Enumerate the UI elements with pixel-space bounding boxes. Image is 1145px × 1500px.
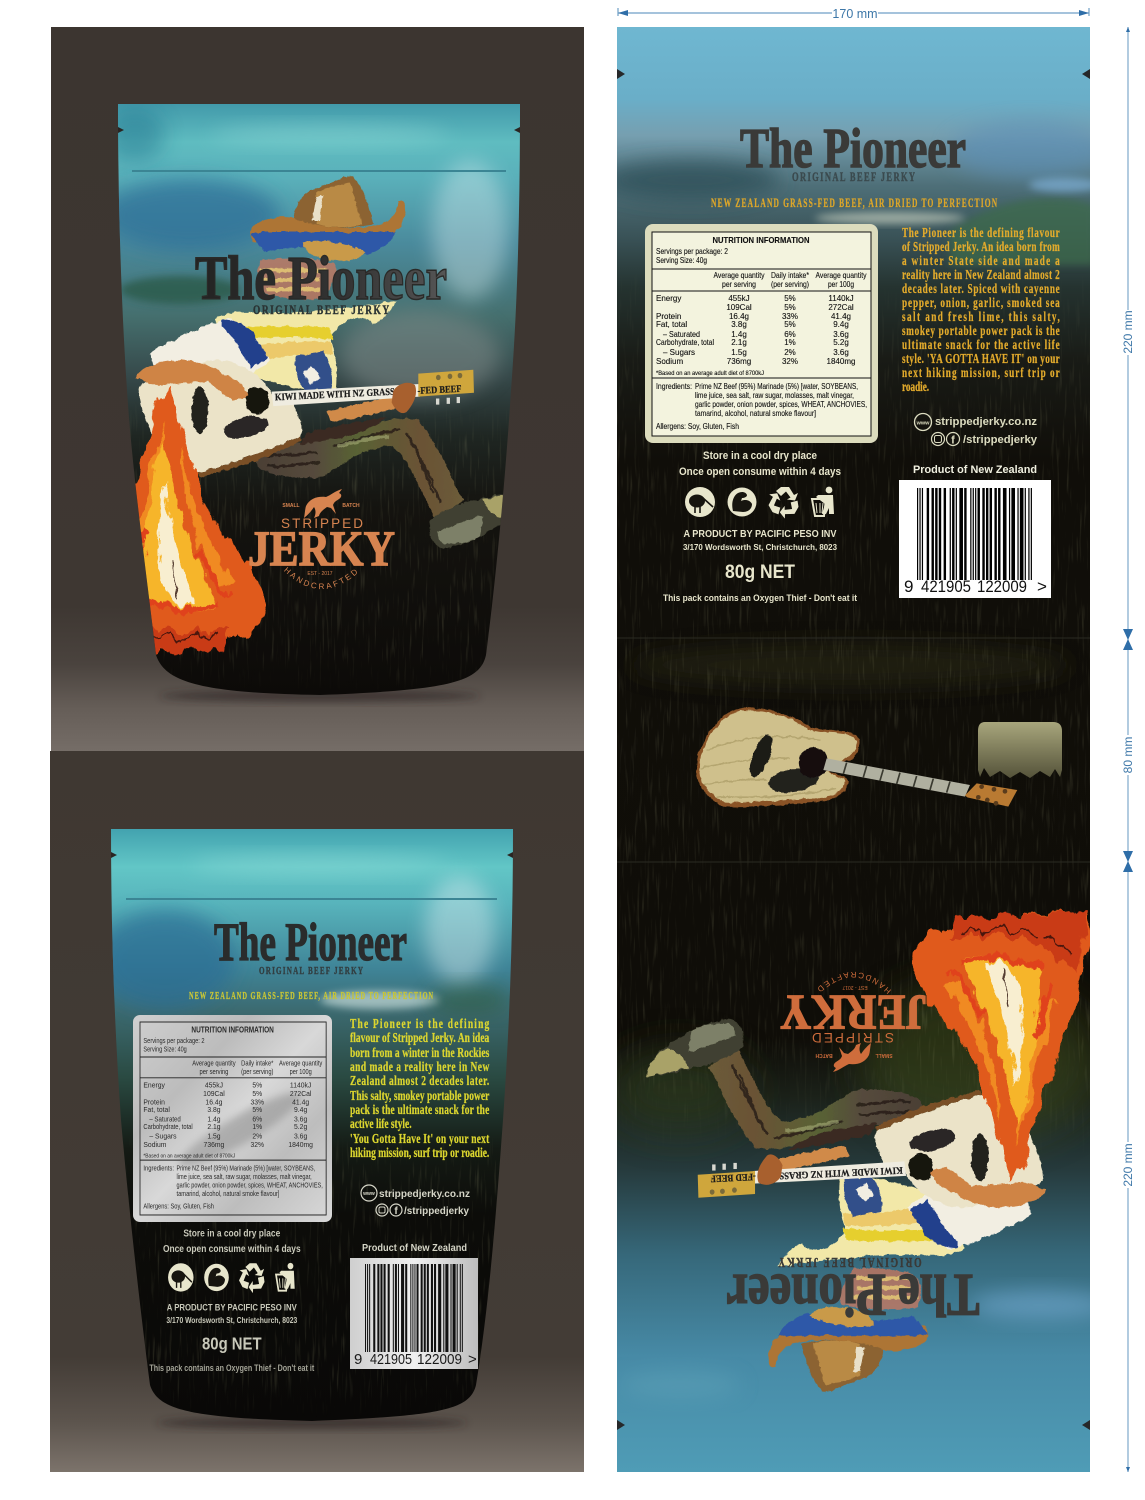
nutrition panel: 5% <box>784 294 796 303</box>
nutrition panel: 5% <box>784 320 796 329</box>
mockup backdrop <box>50 751 584 1472</box>
description copy: salt and fresh lime, this salty, <box>902 310 1060 325</box>
nutrition panel: per 100g <box>290 1067 312 1076</box>
nutrition panel: Daily intake* <box>241 1058 274 1068</box>
dimension: heights 220, 80, 220 mm: 220 mm <box>1121 310 1135 354</box>
description copy: of Stripped Jerky. An idea born from <box>902 240 1060 255</box>
description copy <box>902 226 1060 395</box>
artwork ground <box>600 27 1110 1472</box>
nutrition panel: Fat, total <box>656 320 687 329</box>
guitar neck slogan <box>275 383 462 413</box>
nutrition panel: 32% <box>782 357 798 366</box>
title: The Pioneer: The Pioneer <box>740 118 966 180</box>
nutrition panel: Sodium <box>143 1140 166 1149</box>
nutrition panel: 1140kJ <box>828 294 854 303</box>
nutrition panel: Average quantity <box>816 271 866 280</box>
website and social links: /strippedjerky <box>963 434 1038 446</box>
illustration: acoustic guitar on gusset <box>696 707 1017 807</box>
nutrition panel: tamarind, alcohol, natural smoke flavour] <box>177 1189 279 1198</box>
panel: back pack mockup <box>50 751 584 1472</box>
subtitle: ORIGINAL BEEF JERKY <box>792 170 915 185</box>
nutrition panel: 2% <box>252 1131 263 1140</box>
dimension: heights 220, 80, 220 mm <box>1121 27 1135 1472</box>
barcode: 421905 <box>921 577 971 596</box>
nutrition panel: 5% <box>252 1080 263 1089</box>
panel: front pack mockup <box>51 27 584 751</box>
nutrition panel: 3.6g <box>294 1131 307 1140</box>
nutrition panel: Protein <box>143 1097 165 1106</box>
nutrition panel: Ingredients: <box>656 382 692 391</box>
nutrition panel: Prime NZ Beef (95%) Marinade (5%) [water, SOYBEANS, <box>695 382 858 391</box>
nutrition panel: Serving Size: 40g <box>143 1044 187 1053</box>
brand logo: Stripped Jerky: JERKY <box>248 520 395 576</box>
website and social links: f <box>951 434 955 446</box>
guitar neck slogan: -FED BEEF <box>417 384 462 397</box>
description copy: roadie. <box>902 380 929 395</box>
nutrition panel: 109Cal <box>203 1088 225 1098</box>
barcode: 9 <box>904 577 913 596</box>
description copy: decades later. Spiced with cayenne <box>902 282 1060 297</box>
description copy: This salty, smokey portable power <box>350 1088 489 1103</box>
nutrition panel: 5% <box>252 1105 263 1114</box>
guitar neck slogan, inverted <box>710 1154 903 1185</box>
nutrition panel: 736mg <box>204 1140 224 1149</box>
website and social links: www <box>916 420 930 426</box>
nutrition panel: 3.6g <box>833 348 849 357</box>
panel: flat dieline artwork <box>600 27 1110 1472</box>
guitar neck slogan, inverted: -FED BEEF <box>710 1170 756 1183</box>
website and social links <box>361 1185 470 1217</box>
description copy: pepper, onion, garlic, smoked sea <box>902 296 1060 311</box>
front pouch <box>118 104 520 695</box>
storage, icons, producer and net weight <box>149 1228 314 1373</box>
barcode: > <box>1037 577 1047 596</box>
subtitle: ORIGINAL BEEF JERKY <box>259 966 363 978</box>
nutrition panel: tamarind, alcohol, natural smoke flavour] <box>695 409 816 418</box>
mockup backdrop <box>51 27 584 751</box>
nutrition panel: Prime NZ Beef (95%) Marinade (5%) [water, SOYBEANS, <box>177 1163 315 1173</box>
nutrition panel: Serving Size: 40g <box>656 256 707 265</box>
inverted brand logo: Stripped Jerky: STRIPPED <box>812 1030 894 1045</box>
nutrition panel: garlic powder, onion powder, spices, WHEAT, ANCHOVIES, <box>177 1180 323 1190</box>
nutrition panel: 2.1g <box>731 338 747 347</box>
nutrition panel: Ingredients: <box>143 1163 174 1173</box>
inverted brand logo: Stripped Jerky <box>780 972 927 1072</box>
description copy: ultimate snack for the active life <box>902 338 1060 353</box>
nutrition panel: Average quantity <box>714 271 764 280</box>
website and social links: /strippedjerky <box>404 1205 469 1217</box>
nutrition panel: NUTRITION INFORMATION <box>191 1025 274 1035</box>
nutrition panel: Servings per package: 2 <box>143 1035 205 1045</box>
nutrition panel: 6% <box>252 1114 263 1123</box>
nutrition panel: 16.4g <box>205 1097 222 1106</box>
small batch line with bull icon <box>282 489 360 518</box>
nutrition panel: *Based on an average adult diet of 8700kJ <box>656 371 764 377</box>
description copy: born from a winter in the Rockies <box>350 1045 490 1060</box>
producer details and net weight <box>663 529 858 604</box>
nutrition panel: Allergens: Soy, Gluten, Fish <box>143 1201 214 1210</box>
nutrition panel: 41.4g <box>292 1097 309 1106</box>
description copy: The Pioneer is the defining flavour <box>902 226 1060 241</box>
barcode <box>899 480 1051 598</box>
storage instructions: Store in a cool dry place <box>703 450 817 462</box>
nutrition panel: lime juice, sea salt, raw sugar, molasses, malt vinegar, <box>177 1172 312 1181</box>
description copy: style. 'YA GOTTA HAVE IT' on your <box>902 352 1060 367</box>
nutrition panel <box>645 224 878 443</box>
storage, icons, producer and net weight: 3/170 Wordsworth St, Christchurch, 8023 <box>166 1315 297 1325</box>
nutrition panel: 455kJ <box>205 1080 223 1089</box>
nutrition panel: 3.8g <box>731 320 747 329</box>
inverted brand logo: Stripped Jerky: SMALL <box>875 1052 893 1058</box>
nutrition panel: Fat, total <box>143 1105 170 1114</box>
small batch line with bull icon: BATCH <box>342 503 360 509</box>
nutrition panel: 455kJ <box>728 294 750 303</box>
inverted brand logo: Stripped Jerky: BATCH <box>815 1052 833 1058</box>
storage instructions: Once open consume within 4 days <box>679 466 841 478</box>
icons: kiwi, muscle, recycle, litter <box>685 487 834 522</box>
nutrition panel: per 100g <box>828 280 854 289</box>
nutrition panel: per serving <box>722 280 756 289</box>
subtitle: ORIGINAL BEEF JERKY <box>253 304 389 317</box>
nutrition panel: 736mg <box>727 357 751 366</box>
nutrition panel: Protein <box>656 312 681 321</box>
nutrition panel: – Saturated <box>663 330 700 339</box>
storage, icons, producer and net weight: This pack contains an Oxygen Thief - Don't eat it <box>149 1363 314 1373</box>
nutrition panel: 3.6g <box>833 330 849 339</box>
barcode: > <box>468 1351 477 1368</box>
storage, icons, producer and net weight: 80g NET <box>202 1334 262 1354</box>
nutrition panel: 272Cal <box>290 1088 312 1098</box>
brand logo: Stripped Jerky <box>248 489 395 590</box>
nutrition panel: 33% <box>250 1097 265 1106</box>
tear notches <box>118 127 520 133</box>
dimension: heights 220, 80, 220 mm: 80 mm <box>1121 737 1135 773</box>
website and social links: f <box>394 1206 398 1217</box>
nutrition panel: per serving <box>200 1067 228 1076</box>
inverted brand logo: Stripped Jerky: HANDCRAFTED <box>818 972 891 994</box>
nutrition panel: 33% <box>782 312 798 321</box>
barcode <box>350 1258 478 1369</box>
nutrition panel: 1.5g <box>731 348 747 357</box>
nutrition panel: 1% <box>252 1122 263 1131</box>
nutrition panel: 5.2g <box>833 338 849 347</box>
description copy: and made a reality here in New <box>350 1059 490 1074</box>
nutrition panel: Carbohydrate, total <box>143 1122 193 1131</box>
description copy: next hiking mission, surf trip or <box>902 366 1060 381</box>
back pouch <box>95 825 530 1425</box>
inverted brand logo: Stripped Jerky: JERKY <box>780 985 927 1041</box>
nutrition panel: 3.8g <box>207 1105 221 1114</box>
nutrition panel: Average quantity <box>192 1058 236 1068</box>
tagline: NEW ZEALAND GRASS-FED BEEF, AIR DRIED TO PERFECTION <box>189 989 434 1001</box>
description copy: a winter State side and made a <box>902 254 1060 269</box>
nutrition panel: garlic powder, onion powder, spices, WHEAT, ANCHOVIES, <box>695 400 867 409</box>
producer details and net weight: 3/170 Wordsworth St, Christchurch, 8023 <box>683 542 837 552</box>
storage, icons, producer and net weight: Store in a cool dry place <box>183 1228 281 1240</box>
brand logo: Stripped Jerky: STRIPPED <box>281 516 363 531</box>
origin label: Product of New Zealand <box>362 1243 467 1254</box>
description copy: Zealand almost 2 decades later. <box>350 1073 489 1088</box>
product window placeholder <box>978 722 1062 778</box>
brand logo: Stripped Jerky: HANDCRAFTED <box>284 567 357 590</box>
nutrition panel: Average quantity <box>279 1058 323 1068</box>
dimension: width 170 mm: 170 mm <box>832 7 878 21</box>
dimension: width 170 mm <box>618 7 1089 21</box>
nutrition panel: – Saturated <box>149 1114 181 1123</box>
nutrition panel: 1.4g <box>207 1114 221 1123</box>
nutrition panel: (per serving) <box>241 1067 273 1076</box>
description copy: active life style. <box>350 1116 412 1131</box>
nutrition panel: 6% <box>784 330 796 339</box>
nutrition panel: 272Cal <box>828 303 854 312</box>
nutrition panel: 5% <box>784 303 796 312</box>
website and social links: www <box>362 1191 375 1197</box>
nutrition panel: 1.5g <box>207 1131 221 1140</box>
nutrition panel: 109Cal <box>726 303 752 312</box>
nutrition panel: Servings per package: 2 <box>656 247 728 256</box>
description copy: smokey portable power pack is the <box>902 324 1060 339</box>
storage, icons, producer and net weight: A PRODUCT BY PACIFIC PESO INV <box>167 1302 297 1313</box>
tagline: NEW ZEALAND GRASS-FED BEEF, AIR DRIED TO PERFECTION <box>711 197 998 211</box>
nutrition panel: Sodium <box>656 357 683 366</box>
title: The Pioneer: The Pioneer <box>214 912 407 972</box>
website and social links: strippedjerky.co.nz <box>379 1188 470 1200</box>
description copy: flavour of Stripped Jerky. An idea <box>350 1030 489 1045</box>
nutrition panel: 5.2g <box>294 1122 307 1131</box>
nutrition panel: 1% <box>784 338 796 347</box>
inverted pioneer illustration <box>647 914 1088 1392</box>
producer details and net weight: 80g NET <box>725 562 795 583</box>
barcode: 9 <box>354 1351 362 1368</box>
nutrition panel: 1840mg <box>288 1140 313 1149</box>
nutrition panel: NUTRITION INFORMATION <box>712 235 810 245</box>
small batch line with bull icon: SMALL <box>282 503 300 509</box>
guitar neck slogan: KIWI MADE WITH NZ GRASS <box>275 387 395 404</box>
brand logo: Stripped Jerky: EST - 2017 <box>307 571 333 577</box>
inverted subtitle: ORIGINAL BEEF JERKY <box>778 1255 922 1269</box>
nutrition panel: 1840mg <box>827 357 855 366</box>
nutrition panel: (per serving) <box>771 280 809 289</box>
pioneer illustration <box>95 176 523 654</box>
description copy <box>350 1016 490 1160</box>
nutrition panel: Energy <box>143 1080 165 1089</box>
registration notches <box>617 69 1090 1430</box>
nutrition panel: 16.4g <box>729 312 749 321</box>
nutrition panel: 1140kJ <box>290 1080 312 1089</box>
nutrition panel: – Sugars <box>149 1131 177 1140</box>
description copy: The Pioneer is the defining <box>350 1016 489 1031</box>
pouch shadow <box>160 690 480 702</box>
nutrition panel: 41.4g <box>831 312 851 321</box>
tear notches <box>111 852 513 858</box>
nutrition panel: 3.6g <box>294 1114 307 1123</box>
website and social links <box>914 414 1038 446</box>
origin label: Product of New Zealand <box>913 464 1037 476</box>
guitar neck slogan, inverted: KIWI MADE WITH NZ GRASS <box>779 1164 903 1180</box>
dimension: heights 220, 80, 220 mm: 220 mm <box>1121 1143 1135 1187</box>
pouch shadow <box>157 1417 467 1429</box>
nutrition panel: 9.4g <box>833 320 849 329</box>
nutrition panel: 32% <box>250 1140 265 1149</box>
nutrition panel: Energy <box>656 294 681 303</box>
inverted brand logo: Stripped Jerky: EST - 2017 <box>842 984 868 990</box>
description copy: hiking mission, surf trip or roadie. <box>350 1145 489 1160</box>
nutrition panel: 2% <box>784 348 796 357</box>
nutrition panel: 9.4g <box>294 1105 307 1114</box>
producer details and net weight: This pack contains an Oxygen Thief - Don't eat it <box>663 593 858 604</box>
barcode: 122009 <box>977 577 1027 596</box>
nutrition panel <box>133 1015 332 1222</box>
nutrition panel: 5% <box>252 1088 263 1098</box>
nutrition panel: 2.1g <box>207 1122 221 1131</box>
storage instructions <box>679 450 841 478</box>
barcode: 122009 <box>417 1351 462 1368</box>
storage, icons, producer and net weight: Once open consume within 4 days <box>163 1243 301 1255</box>
description copy: 'You Gotta Have It' on your next <box>350 1131 489 1146</box>
nutrition panel: Daily intake* <box>771 271 809 280</box>
nutrition panel: *Based on an average adult diet of 8700kJ <box>143 1153 235 1159</box>
producer details and net weight: A PRODUCT BY PACIFIC PESO INV <box>684 529 837 540</box>
description copy: pack is the ultimate snack for the <box>350 1102 489 1117</box>
title: The Pioneer: The Pioneer <box>195 245 447 313</box>
description copy: reality here in New Zealand almost 2 <box>902 268 1060 283</box>
inverted title: The Pioneer: The Pioneer <box>726 1262 980 1328</box>
nutrition panel: lime juice, sea salt, raw sugar, molasses, malt vinegar, <box>695 391 854 400</box>
nutrition panel: – Sugars <box>663 348 695 357</box>
nutrition panel: Allergens: Soy, Gluten, Fish <box>656 422 739 431</box>
website and social links: strippedjerky.co.nz <box>935 416 1038 428</box>
nutrition panel: Carbohydrate, total <box>656 338 714 347</box>
barcode: 421905 <box>370 1351 412 1368</box>
nutrition panel: 1.4g <box>731 330 747 339</box>
